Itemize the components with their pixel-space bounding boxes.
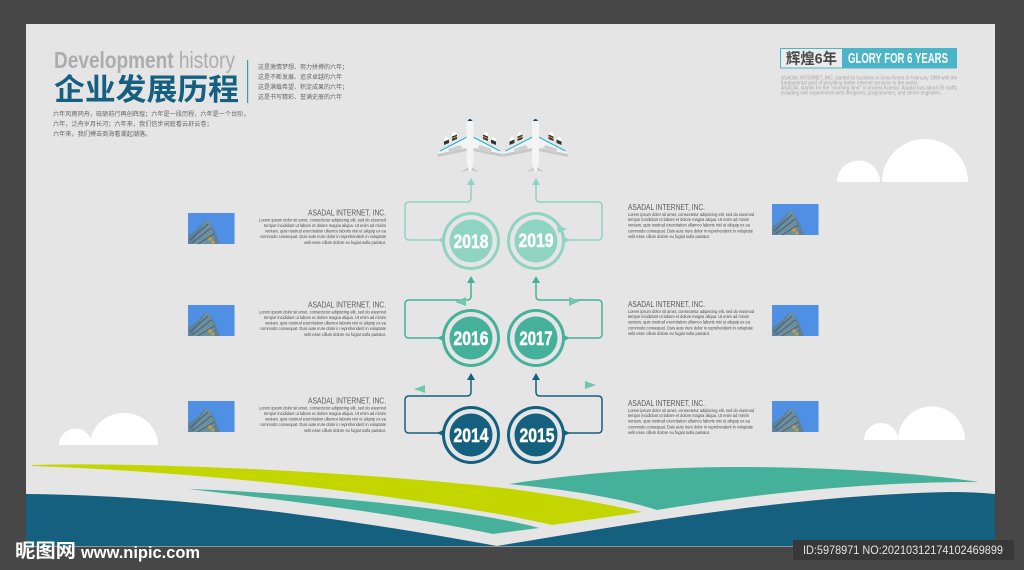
company description <box>781 76 957 96</box>
timeline node 2019: 2019 <box>518 231 554 252</box>
left entry 2014: ASADAL INTERNET, INC. <box>308 396 386 406</box>
right entry 2015: ASADAL INTERNET, INC. <box>628 399 705 408</box>
left entry 2018: ASADAL INTERNET, INC. <box>308 208 386 218</box>
cloud top right <box>837 139 968 182</box>
image id tag <box>793 540 1014 560</box>
left entry 2018: velit esse cillum dolore eu fugiat nulla pariatur. <box>304 240 386 246</box>
timeline node 2018: 2018 <box>454 232 488 253</box>
right entry 2015 <box>628 399 818 436</box>
left entry 2016: commodo consequat. Duis aute irure dolor in reprehenderit in voluptate <box>260 326 386 332</box>
left entry 2016: velit esse cillum dolore eu fugiat nulla pariatur. <box>304 332 386 338</box>
left entry 2018: veniam, quis nostrud exercitation ullamco laboris nisi ut aliquip ex ea <box>265 228 386 234</box>
intro paragraph: 六年风雨同舟，砥砺前行再创辉煌；六年是一段历程，六年是一个台阶， <box>53 110 250 118</box>
left entry 2018: commodo consequat. Duis aute irure dolor in reprehenderit in voluptate <box>260 234 386 240</box>
right entry 2015: velit esse cillum dolore eu fugiat nulla pariatur. <box>628 430 710 436</box>
right entry 2017: ASADAL INTERNET, INC. <box>628 300 705 309</box>
left entry 2014: tempor incididunt ut labore et dolore magna aliqua. Ut enim ad minim <box>264 411 386 417</box>
right entry 2019 <box>628 203 818 240</box>
side slogan text: 这是不断发展、追求卓越的六年 <box>258 73 342 81</box>
left entry 2016: ASADAL INTERNET, INC. <box>308 300 386 310</box>
right entry 2015: veniam, quis nostrud exercitation ullamco laboris nisi ut aliquip ex ea <box>628 418 750 424</box>
left entry 2014: veniam, quis nostrud exercitation ullamco laboris nisi ut aliquip ex ea <box>265 416 386 422</box>
intro paragraph: 六年来，我们搏击商海看潮起潮落。 <box>53 130 151 138</box>
watermark logo: 昵图网 <box>15 540 76 562</box>
timeline node 2014 <box>405 373 500 464</box>
right entry 2019: commodo consequat. Duis aute irure dolor in reprehenderit in voluptate <box>628 228 753 234</box>
airplane right <box>502 119 568 173</box>
company description: ASADAL stands for the "morning land" in ancient Korean. Asadal has about 35 staffs <box>781 86 957 92</box>
left entry 2016: veniam, quis nostrud exercitation ullamco laboris nisi ut aliquip ex ea <box>265 320 386 326</box>
right entry 2015: tempor incididunt ut labore et dolore magna aliqua. Ut enim ad minim <box>628 413 749 419</box>
right entry 2019: tempor incididunt ut labore et dolore magna aliqua. Ut enim ad minim <box>628 217 749 223</box>
timeline node 2016 <box>405 276 500 367</box>
right entry 2017: velit esse cillum dolore eu fugiat nulla pariatur. <box>628 331 710 337</box>
left entry 2014 <box>188 396 386 434</box>
intro paragraph: 六年，泛舟岁月长河；六年来，我们信步闲庭看云舒云卷； <box>53 120 213 128</box>
watermark logo: www.nipic.com <box>80 543 200 562</box>
left entry 2014: velit esse cillum dolore eu fugiat nulla pariatur. <box>304 428 386 434</box>
right entry 2019: Lorem ipsum dolor sit amet, consectetur adipiscing elit, sed do eiusmod <box>628 212 754 218</box>
left entry 2014: commodo consequat. Duis aute irure dolor in reprehenderit in voluptate <box>260 422 386 428</box>
side slogan text: 这是书写精彩、誉满史册的六年 <box>258 93 342 101</box>
right entry 2017: tempor incididunt ut labore et dolore magna aliqua. Ut enim ad minim <box>628 314 749 320</box>
timeline node 2015 <box>507 373 602 464</box>
company description: ASADAL INTERNET, INC. started its business in Seou Korea in February 1998 with the <box>781 76 957 82</box>
right entry 2017: Lorem ipsum dolor sit amet, consectetur adipiscing elit, sed do eiusmod <box>628 309 754 315</box>
glory badge: GLORY FOR 6 YEARS <box>848 51 948 67</box>
watermark logo <box>15 540 200 562</box>
timeline node 2015: 2015 <box>520 426 555 447</box>
left entry 2018 <box>188 208 386 246</box>
english heading: Development history <box>54 47 235 73</box>
right entry 2017: veniam, quis nostrud exercitation ullamco laboris nisi ut aliquip ex ea <box>628 320 750 326</box>
company description: including well experienced web designers, programmers, and server engineers. <box>781 90 942 96</box>
intro paragraph <box>53 110 250 138</box>
timeline node 2016: 2016 <box>454 329 488 350</box>
right entry 2015: Lorem ipsum dolor sit amet, consectetur adipiscing elit, sed do eiusmod <box>628 408 754 414</box>
timeline node 2018 <box>405 178 500 270</box>
right entry 2017 <box>628 300 818 337</box>
cloud bottom left <box>59 413 158 445</box>
timeline node 2017: 2017 <box>520 329 552 350</box>
ground: lime band <box>32 464 642 525</box>
left entry 2014: Lorem ipsum dolor sit amet, consectetur adipiscing elit, sed do eiusmod <box>259 406 386 412</box>
timeline node 2019 <box>507 178 602 270</box>
left entry 2016 <box>188 300 386 338</box>
right entry 2019: ASADAL INTERNET, INC. <box>628 203 705 212</box>
heading block <box>53 47 348 138</box>
right entry 2015: commodo consequat. Duis aute irure dolor in reprehenderit in voluptate <box>628 424 753 430</box>
image id tag: ID:5978971 NO:20210312174102469899 <box>803 545 1003 557</box>
panel bottom edge <box>26 545 995 548</box>
left entry 2016: tempor incididunt ut labore et dolore magna aliqua. Ut enim ad minim <box>264 315 386 321</box>
left entry 2018: Lorem ipsum dolor sit amet, consectetur adipiscing elit, sed do eiusmod <box>259 218 386 224</box>
glory badge <box>780 48 957 68</box>
left entry 2018: tempor incididunt ut labore et dolore magna aliqua. Ut enim ad minim <box>264 223 386 229</box>
glory badge: 辉煌6年 <box>786 50 837 68</box>
chinese heading: 企业发展历程 <box>54 74 239 107</box>
left entry 2016: Lorem ipsum dolor sit amet, consectetur adipiscing elit, sed do eiusmod <box>259 310 386 316</box>
right entry 2017: commodo consequat. Duis aute irure dolor in reprehenderit in voluptate <box>628 326 753 332</box>
side slogan text: 这是激情梦想、努力拼搏的六年； <box>258 63 348 71</box>
company description: fundamental goal of providing better internet services to the world. <box>781 80 918 86</box>
ground: dark blue wave <box>26 492 995 546</box>
right entry 2019: velit esse cillum dolore eu fugiat nulla pariatur. <box>628 234 710 240</box>
ground: right teal hill <box>509 467 979 510</box>
ground: teal band <box>188 489 539 534</box>
side slogan text <box>258 63 348 101</box>
cloud bottom right <box>864 406 965 440</box>
timeline node 2014: 2014 <box>454 426 489 447</box>
right entry 2019: veniam, quis nostrud exercitation ullamco laboris nisi ut aliquip ex ea <box>628 222 750 228</box>
timeline node 2017 <box>507 276 602 367</box>
side slogan text: 这是满载希望、积淀成果的六年； <box>258 83 348 91</box>
airplane left <box>437 119 503 173</box>
